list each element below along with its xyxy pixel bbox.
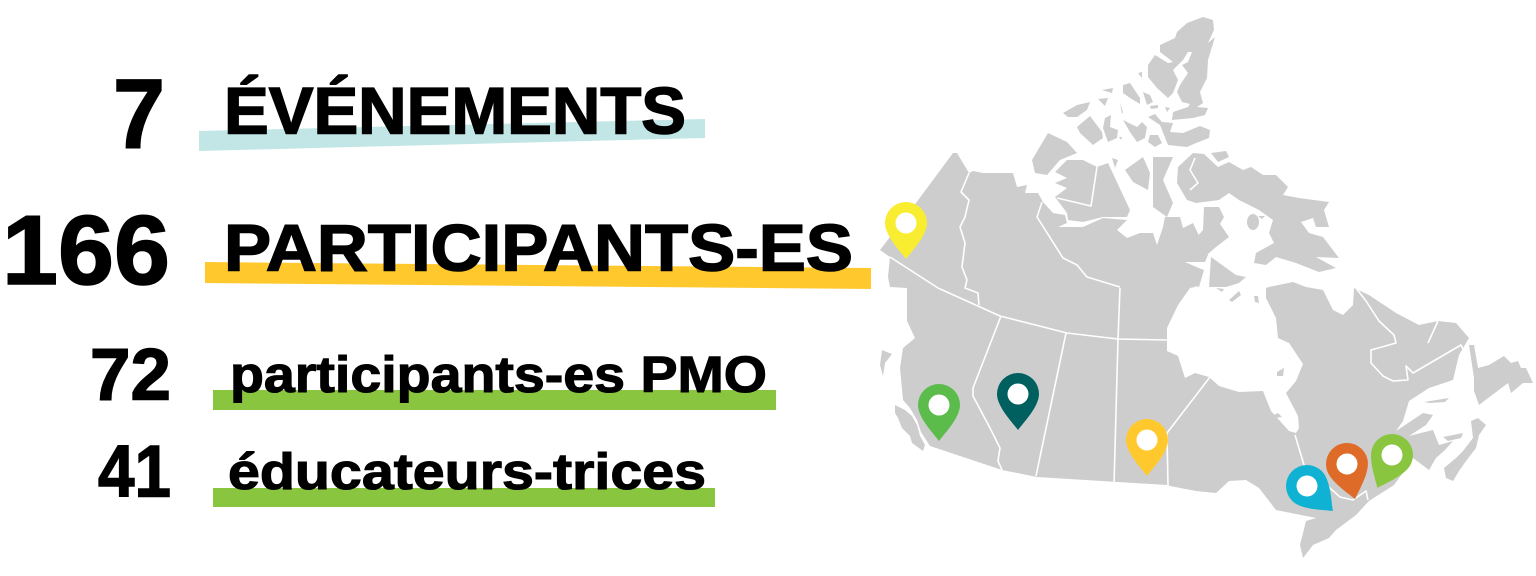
pin: green, British Columbia bbox=[918, 384, 960, 441]
pin: yellow, Yukon bbox=[885, 202, 927, 259]
highlight: green PMO bbox=[213, 390, 776, 410]
heading: participants-es: PARTICIPANTS-ES bbox=[224, 210, 853, 284]
highlight: teal bbox=[199, 119, 705, 151]
number: 166: 166 bbox=[2, 195, 170, 305]
label: participants-es PMO: participants-es PMO bbox=[230, 346, 767, 403]
arctic islands bbox=[1032, 17, 1339, 287]
highlight: green educators bbox=[213, 488, 715, 507]
pin: blue, Ontario bbox=[1277, 456, 1347, 526]
pin: amber, Manitoba bbox=[1126, 419, 1168, 476]
number: 72: 72 bbox=[90, 334, 171, 416]
pin: dark teal, Alberta bbox=[997, 373, 1039, 430]
label: éducateurs-trices: éducateurs-trices bbox=[228, 443, 706, 500]
heading: événements: ÉVÉNEMENTS bbox=[224, 74, 686, 148]
pin: lime, Quebec bbox=[1358, 427, 1420, 496]
number: 7: 7 bbox=[113, 58, 165, 168]
eastern and western islands bbox=[880, 288, 1533, 481]
mainland bbox=[880, 153, 1469, 558]
provincial borders bbox=[890, 158, 1464, 500]
highlight: yellow bbox=[205, 262, 871, 289]
pin: orange, Ontario bbox=[1322, 439, 1376, 504]
stats list bbox=[2, 58, 871, 512]
map of Canada bbox=[880, 17, 1533, 558]
number: 41: 41 bbox=[98, 432, 171, 512]
